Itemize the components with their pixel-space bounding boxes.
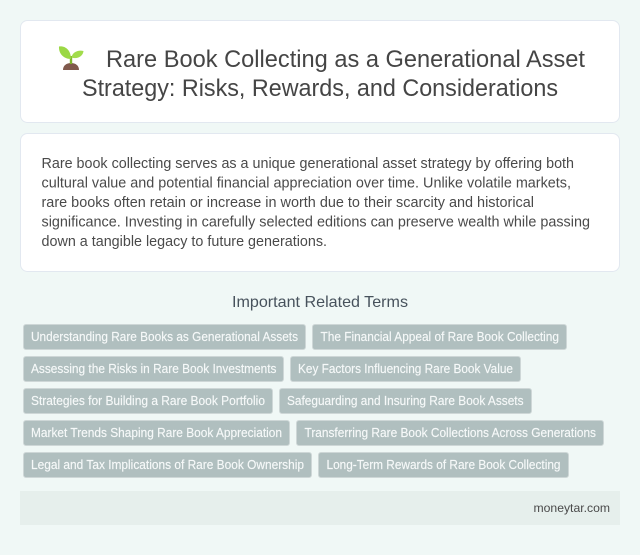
chip: The Financial Appeal of Rare Book Collecting <box>320 329 559 344</box>
chip <box>24 452 312 478</box>
title: Rare Book Collecting as a Generational Asset <box>106 46 585 73</box>
title: Strategy: Risks, Rewards, and Considerations <box>82 75 558 102</box>
footer bar <box>20 491 620 525</box>
chip <box>24 420 290 446</box>
description text: cultural value and potential financial appreciation over time. Unlike volatile markets, <box>42 176 571 192</box>
title <box>82 46 585 102</box>
chip: Legal and Tax Implications of Rare Book Ownership <box>31 457 304 472</box>
heading: important related terms: Important Related Terms <box>232 294 408 311</box>
chip: Transferring Rare Book Collections Across Generations <box>304 425 596 440</box>
chip <box>280 388 532 414</box>
chip: Strategies for Building a Rare Book Portfolio <box>31 393 265 408</box>
panel: related term chips <box>24 324 604 478</box>
chip: Key Factors Influencing Rare Book Value <box>298 361 513 376</box>
chip <box>290 356 520 382</box>
chip <box>318 452 568 478</box>
chip: Long-Term Rewards of Rare Book Collecting <box>326 457 560 472</box>
description text: significance. Investing in carefully selected editions can preserve wealth while passing <box>42 214 590 230</box>
description text: down a tangible legacy to future generations. <box>42 234 327 250</box>
chip: Market Trends Shaping Rare Book Appreciation <box>31 425 282 440</box>
panel: title card <box>20 20 620 122</box>
chip: Understanding Rare Books as Generational Assets <box>31 329 298 344</box>
chip <box>24 356 284 382</box>
chip <box>24 388 272 414</box>
chip <box>296 420 604 446</box>
description text: rare books often retain or increase in worth due to their scarcity and historical <box>42 195 534 211</box>
description text: Rare book collecting serves as a unique generational asset strategy by offering both <box>42 156 574 172</box>
chip: Assessing the Risks in Rare Book Investments <box>31 361 276 376</box>
chip <box>24 324 306 350</box>
chip: Safeguarding and Insuring Rare Book Assets <box>287 393 524 408</box>
footer source: moneytar.com <box>534 501 610 515</box>
description text <box>42 156 590 250</box>
chip <box>312 324 566 350</box>
icon: sprout <box>59 46 84 70</box>
panel: description card <box>20 134 620 272</box>
